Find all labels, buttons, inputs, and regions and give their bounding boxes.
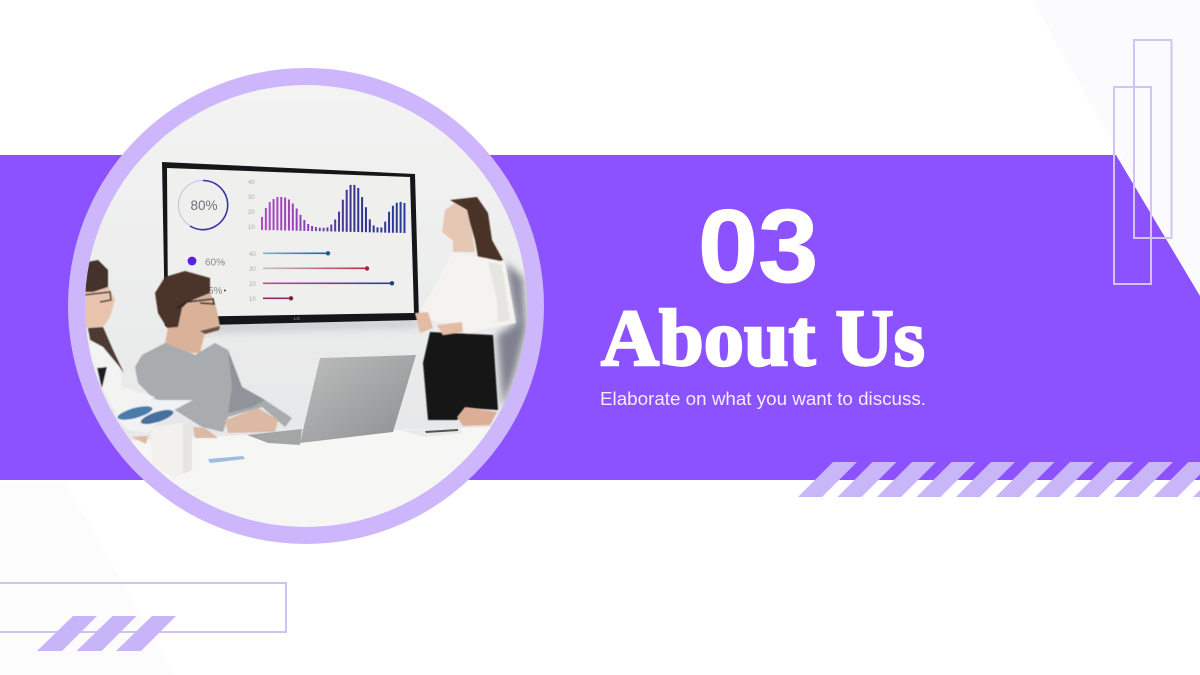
tablet [116,400,193,433]
presenter hands [415,312,433,333]
donut gauge: 80% [190,198,218,213]
striped accent bottom left [37,616,176,651]
monitor logo: LG [294,316,300,321]
axis labels: 20 [249,282,256,288]
axis labels: 10 [249,297,256,303]
woman hair [82,260,108,292]
donut gauge [178,180,228,230]
chart on table [208,456,245,463]
outlined rectangle bottom left [0,583,286,632]
striped accent right [798,462,1200,497]
man neck and face [165,293,220,353]
axis labels: 40 [248,180,255,186]
outlined rectangle top [1134,40,1172,238]
man second hand [193,427,218,438]
axis labels: 40 [249,252,256,258]
axis labels: 30 [248,195,255,201]
photo: meeting with presenter [85,85,527,527]
monitor shadow [205,320,418,336]
presenter shirt [420,252,516,333]
man hair [155,271,210,328]
man beard [200,326,220,334]
man hand on laptop [225,408,278,433]
presenter neck and face [442,203,475,252]
decorative pale triangle top right [1032,0,1200,296]
axis labels [248,180,256,301]
table [131,427,491,527]
legend dots and values: + [222,261,226,267]
legend dots and values: 5% [208,286,223,297]
bar chart [262,185,404,233]
wall shadow by presenter [497,262,526,408]
man glasses [177,299,214,308]
wall monitor [162,162,419,326]
wall [85,85,527,460]
woman face [82,285,115,328]
purple banner [0,155,1200,480]
man with glasses [135,271,292,438]
laptop [247,355,416,445]
presenter [415,197,516,420]
presenter hand on table [457,407,497,426]
presenter skirt [423,332,498,420]
papers on table [404,428,462,437]
subtitle: Elaborate on what you want to discuss. [600,389,926,409]
axis labels: 20 [248,210,255,216]
slider bars [263,251,394,300]
man sweater [135,343,292,432]
decorative pale triangle bottom left [0,482,176,675]
woman at left [82,260,193,444]
outlined rectangle lower [1114,87,1151,284]
axis labels: 10 [248,225,255,231]
heading: About Us [601,295,925,383]
woman long hair [88,327,124,373]
legend dots and values [188,257,226,297]
axis labels: 30 [249,267,256,273]
section number: 03 [698,189,818,305]
woman blouse [88,333,155,417]
blouse heart pattern [97,367,107,388]
legend dots and values: 60% [205,258,225,268]
woman hand [132,436,148,444]
photo ring [77,77,535,535]
woman glasses [84,292,111,302]
mug [151,424,192,474]
presenter hair [450,197,503,268]
